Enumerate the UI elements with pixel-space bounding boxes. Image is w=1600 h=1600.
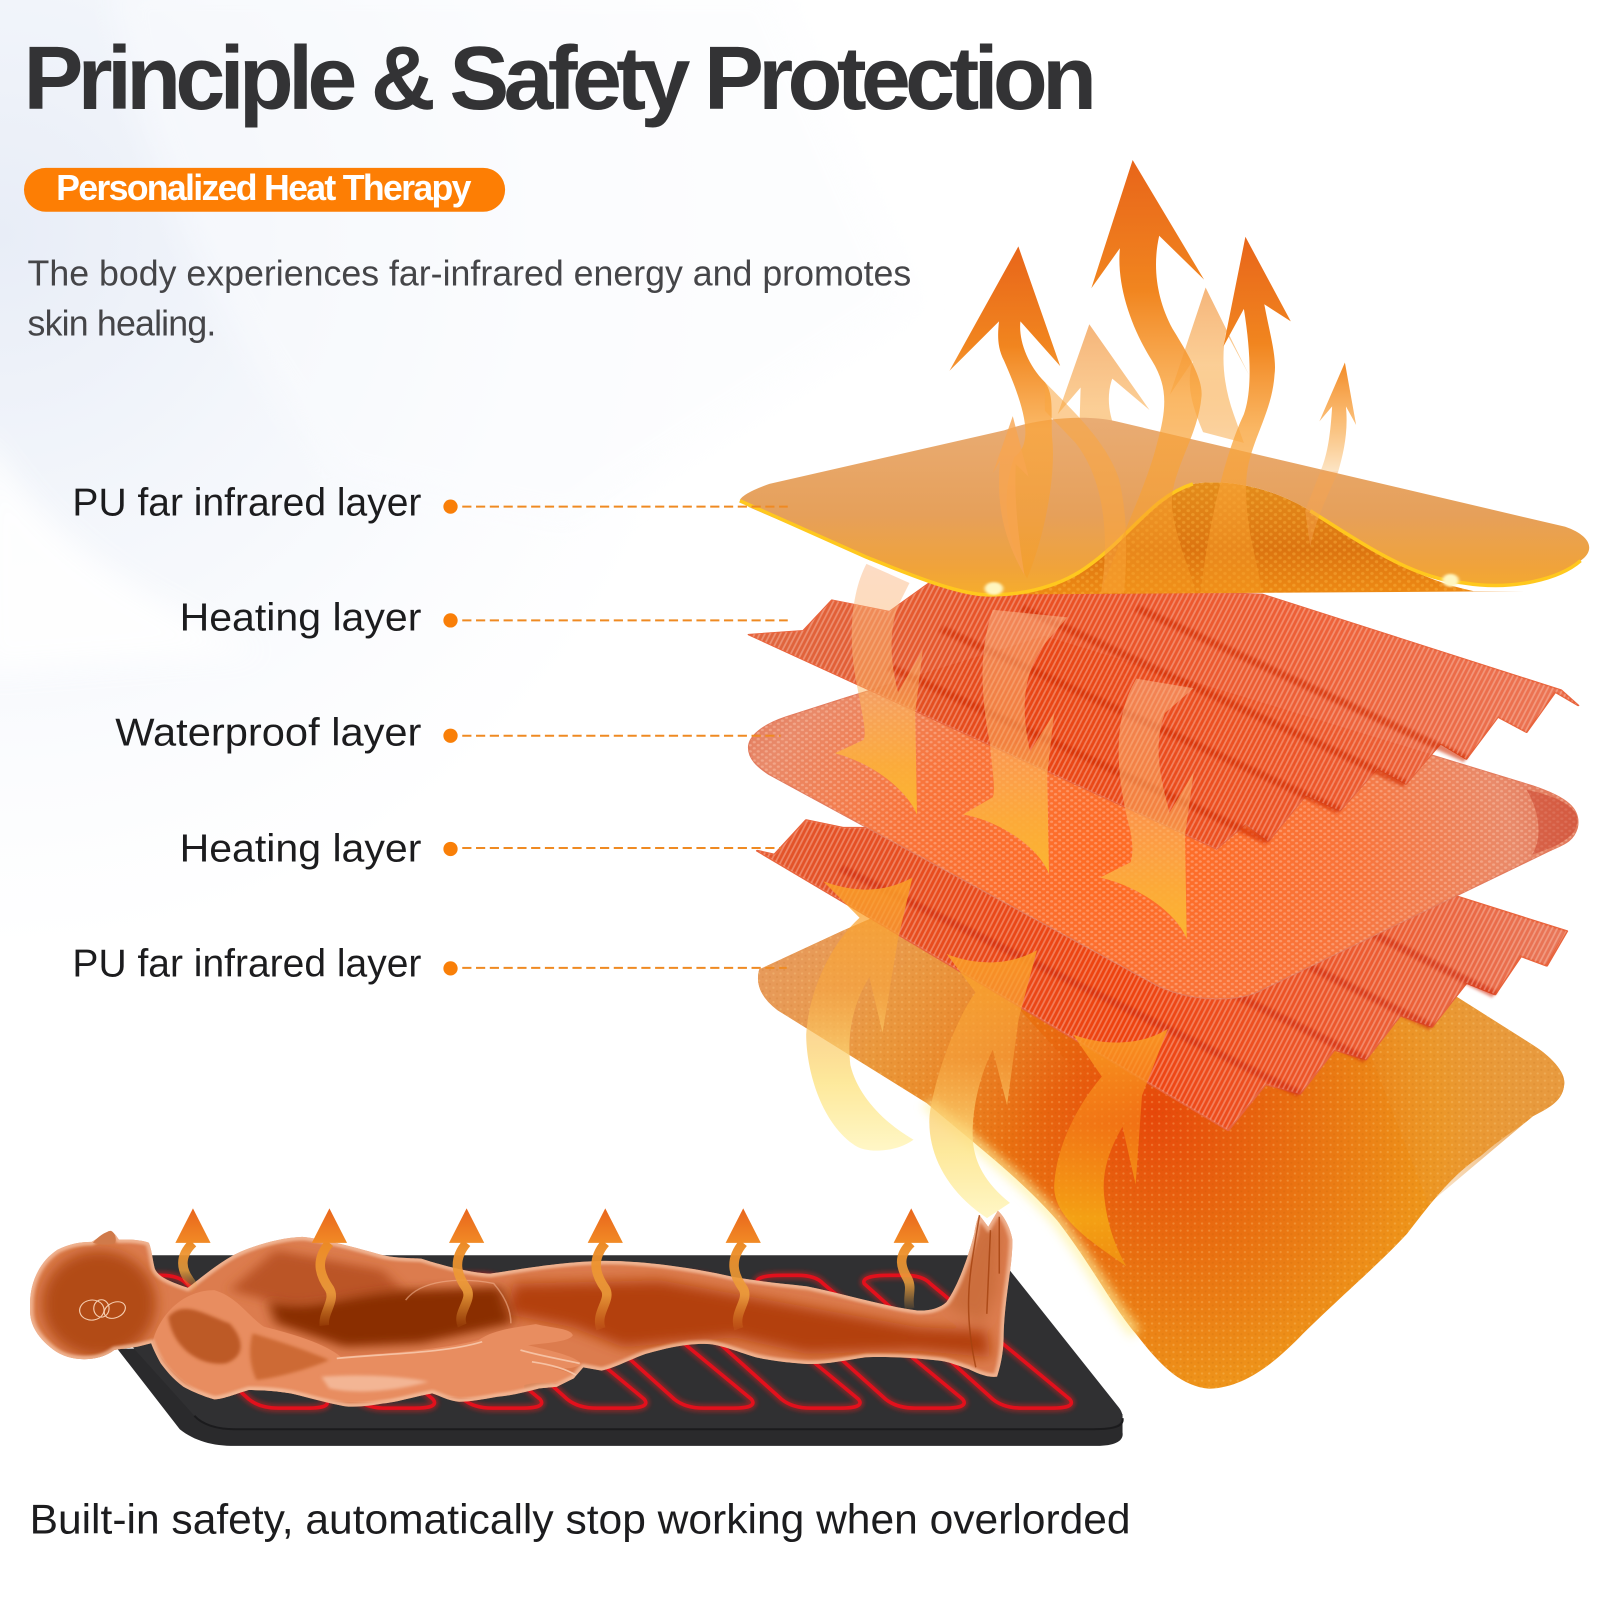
arrows rising through lower layers bbox=[806, 878, 1168, 1266]
arrow: lower middle bbox=[929, 950, 1037, 1218]
arrows descending through middle layers bbox=[835, 564, 1194, 939]
heating coils glow bbox=[120, 1275, 1071, 1408]
description text bbox=[28, 254, 911, 344]
description text: The body experiences far-infrared energy and promotes bbox=[28, 254, 911, 294]
badge: Personalized Heat Therapy: Personalized Heat Therapy bbox=[56, 168, 472, 208]
arrow: middle right bbox=[1100, 679, 1194, 939]
arrow: large left bbox=[949, 246, 1060, 579]
arrow: middle centre bbox=[963, 610, 1067, 874]
layer stack illustration bbox=[740, 160, 1589, 1389]
label row: Heating layer bbox=[180, 597, 788, 640]
arrow: small right tail bbox=[1305, 471, 1338, 546]
label row: Waterproof layer: Waterproof layer bbox=[115, 711, 422, 754]
arrow: small on sheet bbox=[993, 416, 1029, 575]
arrow: small right bbox=[1319, 363, 1356, 471]
heat arrow 1 bbox=[175, 1208, 211, 1289]
mat bbox=[59, 1255, 1123, 1446]
leader labels bbox=[72, 481, 788, 986]
arrow: large right bbox=[1201, 237, 1291, 593]
label row: Waterproof layer bbox=[115, 711, 781, 754]
body bbox=[30, 1210, 1012, 1407]
layer: waterproof bbox=[749, 637, 1578, 999]
heat arrow 6 bbox=[894, 1208, 929, 1309]
glow spots bbox=[985, 574, 1459, 595]
safety note: Built-in safety, automatically stop working when overlorded bbox=[30, 1496, 1131, 1543]
heat arrow 5 bbox=[726, 1208, 761, 1329]
label row: Heating layer: Heating layer bbox=[180, 597, 422, 640]
arrows behind top sheet bbox=[1058, 288, 1356, 493]
label row: PU far infrared layer: PU far infrared layer bbox=[72, 943, 422, 986]
heat arrow 4 bbox=[588, 1208, 623, 1329]
label row: PU far infrared layer: PU far infrared layer bbox=[72, 481, 422, 524]
ear bbox=[77, 1298, 129, 1323]
arrow: lower right bbox=[1054, 1029, 1168, 1266]
layer: bottom PU far infrared bbox=[758, 898, 1564, 1389]
arrow: pale right bbox=[1170, 288, 1249, 443]
heat arrow 2 bbox=[312, 1208, 347, 1326]
arrow: pale left bbox=[1058, 324, 1149, 493]
nose bbox=[93, 1231, 116, 1245]
arrow: lower left bbox=[806, 878, 914, 1151]
foot detail bbox=[969, 1215, 999, 1367]
title: Principle & Safety Protection bbox=[23, 29, 1097, 129]
arrows rising through top sheet bbox=[949, 160, 1338, 593]
heating coils bbox=[120, 1275, 1071, 1408]
heat arrows from mat bbox=[175, 1208, 929, 1329]
layer: top PU far infrared bbox=[740, 418, 1589, 595]
label row: PU far infrared layer bbox=[72, 943, 787, 986]
layer: lower heating bbox=[757, 820, 1567, 1130]
description text: skin healing. bbox=[28, 304, 216, 344]
arrow: middle left bbox=[835, 564, 923, 814]
arrow: left fork bbox=[1045, 382, 1126, 593]
heat arrow 3 bbox=[449, 1208, 484, 1326]
label row: Heating layer: Heating layer bbox=[180, 828, 422, 871]
arrow: tall centre bbox=[1091, 160, 1204, 593]
heating mat with reclining body bbox=[0, 1200, 1123, 1446]
label row: Heating layer bbox=[180, 828, 781, 871]
layer: upper heating bbox=[749, 583, 1578, 849]
label row: PU far infrared layer bbox=[72, 481, 788, 524]
